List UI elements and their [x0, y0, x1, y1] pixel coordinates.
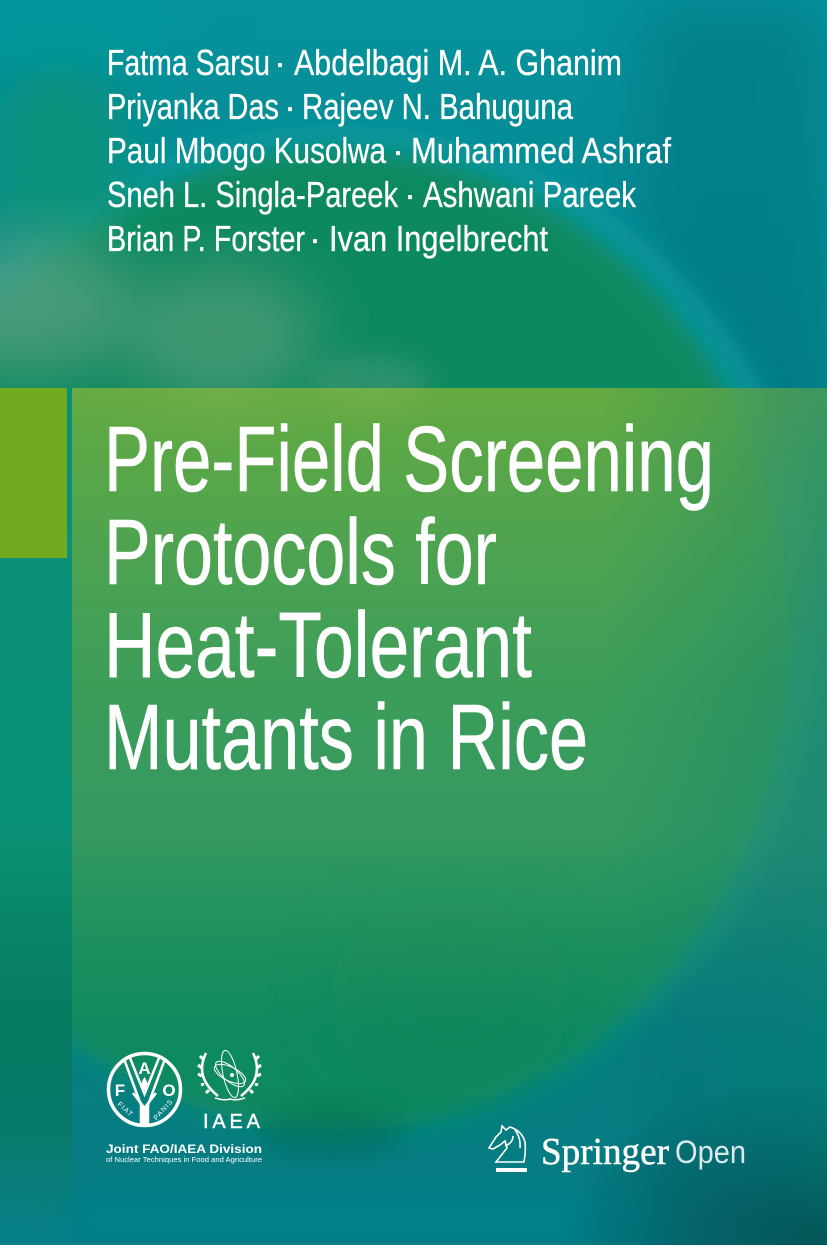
- icon: FAO logo: A: [138, 1059, 151, 1078]
- author line 4: ·: [404, 174, 416, 215]
- title line 2: Protocols for: [104, 500, 497, 604]
- icon: FAO logo: O: [162, 1081, 176, 1100]
- publisher name: Open: [675, 1134, 746, 1170]
- author line 4: Sneh L. Singla-Pareek: [107, 174, 399, 215]
- author line 1: [107, 42, 622, 83]
- icon: Springer horse: [489, 1126, 527, 1172]
- author line 5: Ivan Ingelbrecht: [329, 218, 548, 259]
- author line 5: ·: [309, 218, 321, 259]
- icon: IAEA logo: [198, 1049, 261, 1133]
- icon: IAEA logo: IAEA: [203, 1111, 261, 1133]
- icon: FAO logo: PANIS: [153, 1098, 175, 1122]
- authors: [107, 42, 672, 259]
- author line 1: Fatma Sarsu: [107, 42, 270, 83]
- left strip tone: [0, 388, 72, 1245]
- author line 1: Abdelbagi M. A. Ghanim: [294, 42, 622, 83]
- author line 2: [107, 86, 574, 127]
- author line 5: [107, 218, 548, 259]
- author line 3: Paul Mbogo Kusolwa: [107, 130, 387, 171]
- bright teal arc: [168, 152, 766, 388]
- author line 2: Priyanka Das: [107, 86, 279, 127]
- icon: FAO logo: F: [115, 1081, 125, 1100]
- publisher name: Springer: [541, 1131, 669, 1173]
- icon: FAO logo: FIAT: [116, 1101, 134, 1119]
- author line 3: ·: [392, 130, 404, 171]
- logo caption: of Nuclear Techniques in Food and Agriculture: [106, 1155, 262, 1164]
- author line 2: ·: [284, 86, 296, 127]
- title line 3: Heat-Tolerant: [104, 593, 532, 697]
- author line 3: [107, 130, 672, 171]
- icon: FAO logo: [108, 1054, 180, 1126]
- title line 4: Mutants in Rice: [104, 685, 588, 789]
- author line 1: ·: [274, 42, 286, 83]
- logo caption: [106, 1142, 262, 1164]
- author line 5: Brian P. Forster: [107, 218, 305, 259]
- author line 4: [107, 174, 637, 215]
- author line 4: Ashwani Pareek: [423, 174, 637, 215]
- logo caption: Joint FAO/IAEA Division: [106, 1142, 262, 1156]
- publisher name: [541, 1131, 746, 1173]
- green sphere: [0, 150, 790, 1130]
- author line 2: Rajeev N. Bahuguna: [302, 86, 574, 127]
- panel: title background: [72, 388, 827, 1245]
- title: [104, 407, 714, 789]
- teal lower band: [72, 1195, 672, 1245]
- accent block: [0, 388, 67, 558]
- author line 3: Muhammed Ashraf: [411, 130, 672, 171]
